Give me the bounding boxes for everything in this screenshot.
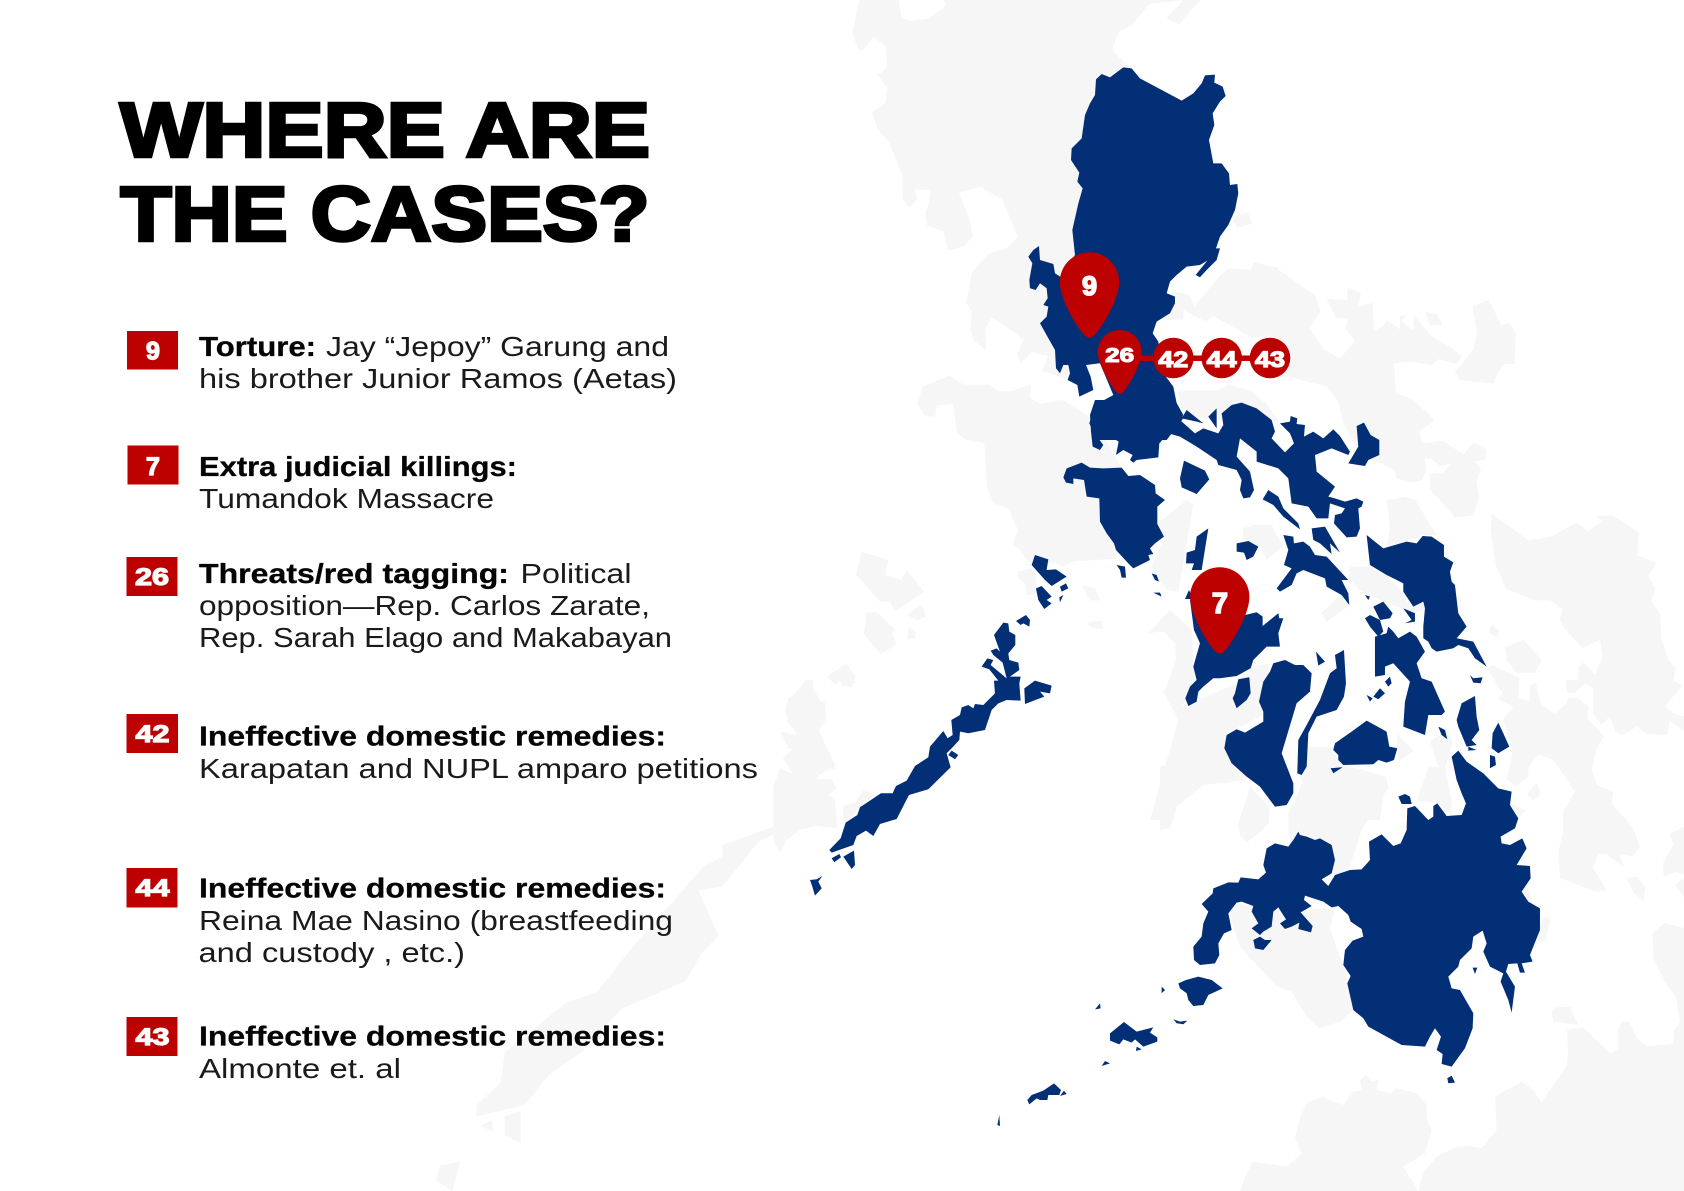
legend item: 44 ineffective remedies: and custody , etc.) xyxy=(198,937,465,968)
island group: Palawan xyxy=(810,555,1068,896)
background: surrounding land masses xyxy=(436,0,1684,1191)
legend item: 26 threats and red tagging: Political xyxy=(520,558,632,589)
marker: pin 9: 9 xyxy=(1082,271,1097,301)
legend item: 7 extra judicial killings: 7 xyxy=(146,453,160,481)
map: Philippines islands xyxy=(810,67,1540,1126)
legend item: 43 ineffective remedies: 43 xyxy=(136,1024,170,1051)
legend item: 42 ineffective remedies: Karapatan and NUPL amparo petitions xyxy=(199,753,758,784)
legend item: 9 torture: Torture: xyxy=(199,331,316,362)
legend item: 9 torture: his brother Junior Ramos (Aetas) xyxy=(199,363,677,394)
island group: Sulu archipelago xyxy=(997,1003,1157,1126)
legend item: 9 torture: 9 xyxy=(146,338,160,366)
marker: circle 43: 43 xyxy=(1255,347,1285,372)
marker: pin 7: 7 xyxy=(1212,588,1228,620)
marker: pin 7 xyxy=(1190,567,1249,654)
legend item: 44 ineffective remedies: Ineffective domestic remedies: xyxy=(199,872,666,904)
legend item: 42 ineffective remedies xyxy=(126,714,758,784)
legend item: 7 extra judicial killings: Tumandok Massacre xyxy=(199,483,494,514)
legend item: 43 ineffective remedies xyxy=(126,1017,666,1084)
island group: Mindanao xyxy=(1162,751,1540,1083)
legend item: 42 ineffective remedies: 42 xyxy=(136,721,170,748)
island group: Luzon xyxy=(1028,67,1238,440)
legend item: 26 threats and red tagging xyxy=(126,557,672,653)
legend item: 26 threats and red tagging: Threats/red tagging: xyxy=(199,558,509,589)
connector line between markers xyxy=(1135,356,1270,361)
title xyxy=(120,88,650,258)
island group: Visayas and southern Luzon xyxy=(1063,400,1509,807)
marker: circle 42 xyxy=(1153,338,1194,378)
legend item: 7 extra judicial killings: Extra judicial killings: xyxy=(199,451,517,482)
marker: circle 44 xyxy=(1201,338,1242,378)
legend item: 44 ineffective remedies xyxy=(126,868,673,968)
title: WHERE ARE xyxy=(120,88,650,174)
marker: circle 43 xyxy=(1250,338,1290,378)
marker: circle 42: 42 xyxy=(1158,347,1188,372)
legend item: 44 ineffective remedies: 44 xyxy=(136,875,170,902)
legend item: 9 torture: Jay “Jepoy” Garung and xyxy=(326,331,669,362)
marker: circle 44: 44 xyxy=(1207,347,1238,372)
legend item: 42 ineffective remedies: Ineffective domestic remedies: xyxy=(199,720,666,752)
legend item: 9 torture xyxy=(127,331,677,394)
legend item: 43 ineffective remedies: Almonte et. al xyxy=(199,1053,401,1084)
legend item: 26 threats and red tagging: 26 xyxy=(135,564,169,591)
marker: pin 26 xyxy=(1098,330,1142,394)
legend item: 43 ineffective remedies: Ineffective domestic remedies: xyxy=(199,1020,666,1052)
legend item: 26 threats and red tagging: opposition—Rep. Carlos Zarate, xyxy=(199,590,650,621)
title: THE CASES? xyxy=(120,172,650,258)
legend item: 26 threats and red tagging: Rep. Sarah Elago and Makabayan xyxy=(199,622,672,653)
legend item: 44 ineffective remedies: Reina Mae Nasino (breastfeeding xyxy=(199,905,673,936)
legend item: 7 extra judicial killings xyxy=(128,446,517,514)
marker: pin 9 xyxy=(1060,252,1119,338)
marker: pin 26: 26 xyxy=(1105,345,1134,367)
